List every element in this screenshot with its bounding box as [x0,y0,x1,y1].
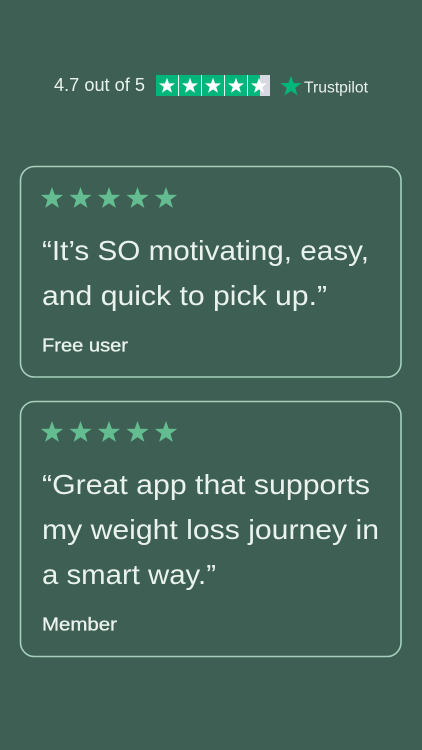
reviewer label: Free user [42,334,128,356]
quote text: a smart way.” [42,559,216,590]
five star rating [41,421,177,442]
rating star bar [156,75,270,96]
quote text: my weight loss journey in [42,514,379,545]
rating summary: Trustpilot [54,75,369,96]
quote text [42,235,369,311]
panel: review 2 [20,402,401,656]
five star rating [41,187,177,208]
card outline [20,166,401,377]
rating text: 4.7 out of 5 [54,75,145,95]
quote text: “It’s SO motivating, easy, [42,235,369,266]
icon: Trustpilot star [280,76,302,95]
quote text: and quick to pick up.” [42,280,327,311]
card outline [20,402,401,656]
panel: review 1 [20,166,401,377]
Trustpilot wordmark: Trustpilot [304,80,369,96]
reviewer label: Member [42,614,117,634]
quote text: “Great app that supports [42,469,370,500]
quote text [42,469,379,590]
